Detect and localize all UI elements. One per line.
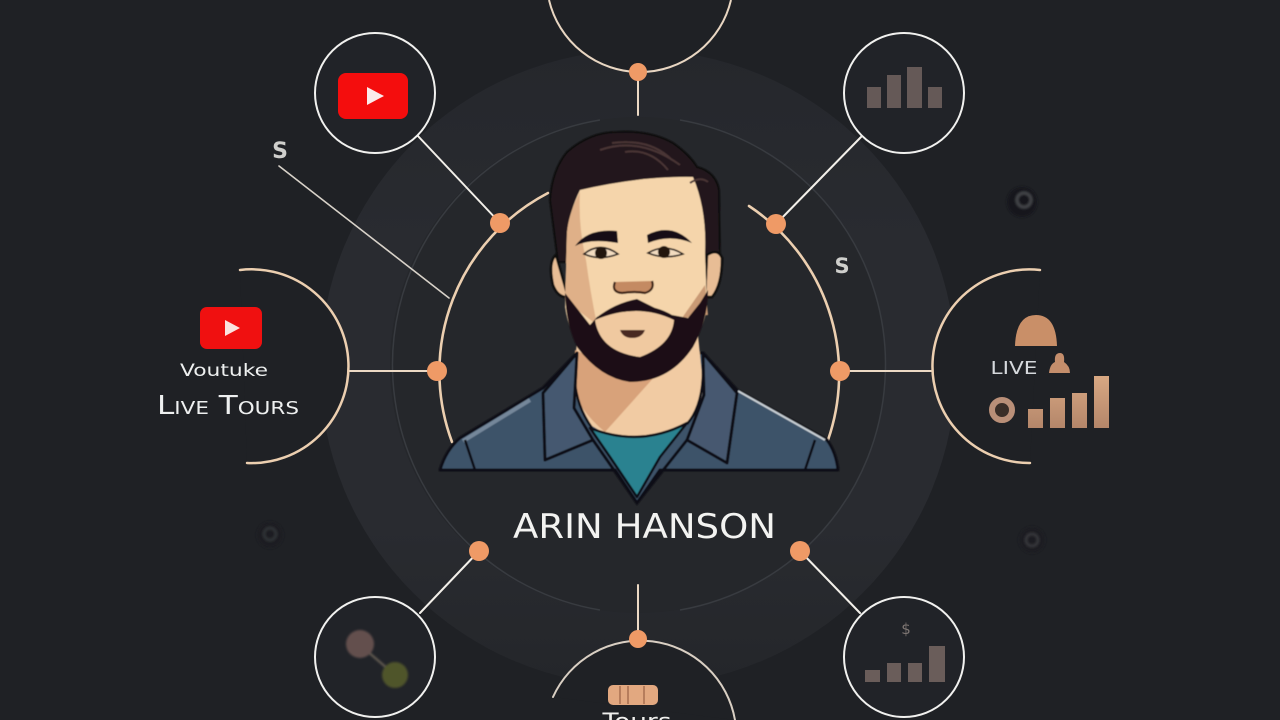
ears bbox=[551, 252, 722, 297]
neck bbox=[573, 335, 703, 452]
eyes bbox=[584, 248, 683, 258]
bottom node arc bbox=[553, 641, 735, 720]
central peach ring arcs bbox=[439, 193, 839, 442]
mouth patch bbox=[595, 311, 674, 357]
outer ring band bbox=[320, 50, 956, 686]
thin ring arcs bbox=[392, 120, 885, 610]
bottom-right circle: bars icon: $ bbox=[901, 620, 911, 638]
top-left circle: YouTube bbox=[315, 33, 435, 153]
faint coin left bbox=[257, 522, 283, 548]
right node: icons and LIVE label: LIVE bbox=[990, 358, 1038, 379]
dollar mark right: S bbox=[834, 254, 850, 278]
name label: ARIN HANSON bbox=[513, 507, 776, 547]
placket bbox=[593, 440, 687, 503]
left node: YouTube logo bbox=[200, 307, 262, 349]
top node arc bbox=[549, 0, 731, 72]
node dots bbox=[427, 63, 850, 648]
teal t-shirt bbox=[590, 423, 687, 497]
faint coin right bbox=[1019, 527, 1045, 553]
beard bbox=[565, 290, 708, 382]
bottom node: scroll icon bbox=[608, 685, 658, 705]
bottom-left circle: nodes icon bbox=[315, 597, 435, 717]
shirt bbox=[440, 353, 838, 503]
right node: icons and LIVE label bbox=[990, 315, 1109, 428]
nose bbox=[614, 281, 653, 293]
bottom-right circle: bars icon bbox=[844, 597, 964, 717]
hair back bbox=[550, 132, 720, 262]
moustache bbox=[596, 299, 673, 318]
right node arc bbox=[932, 269, 1040, 463]
connector lines bbox=[279, 72, 931, 639]
face bbox=[565, 177, 707, 380]
left collar bbox=[543, 353, 593, 460]
left node labels bbox=[157, 361, 299, 421]
left node arc bbox=[240, 269, 348, 463]
faint coin top-right bbox=[1007, 187, 1037, 217]
eyebrows bbox=[575, 230, 692, 246]
shirt highlights bbox=[463, 400, 530, 441]
dollar mark left: S bbox=[272, 139, 288, 164]
sleeve seams bbox=[465, 440, 815, 470]
neck shadow bbox=[573, 350, 665, 432]
portrait: Arin Hanson bbox=[440, 132, 838, 503]
right collar bbox=[687, 353, 737, 463]
top-right circle: bar icon bbox=[844, 33, 964, 153]
neck outline bbox=[575, 365, 703, 428]
inner disc bbox=[390, 117, 886, 613]
mouth bbox=[620, 330, 645, 338]
cheek shadow bbox=[565, 192, 597, 325]
left node labels: Live Tours bbox=[157, 391, 299, 421]
hair highlights bbox=[600, 142, 708, 183]
left node labels: Voutuke bbox=[180, 361, 268, 381]
